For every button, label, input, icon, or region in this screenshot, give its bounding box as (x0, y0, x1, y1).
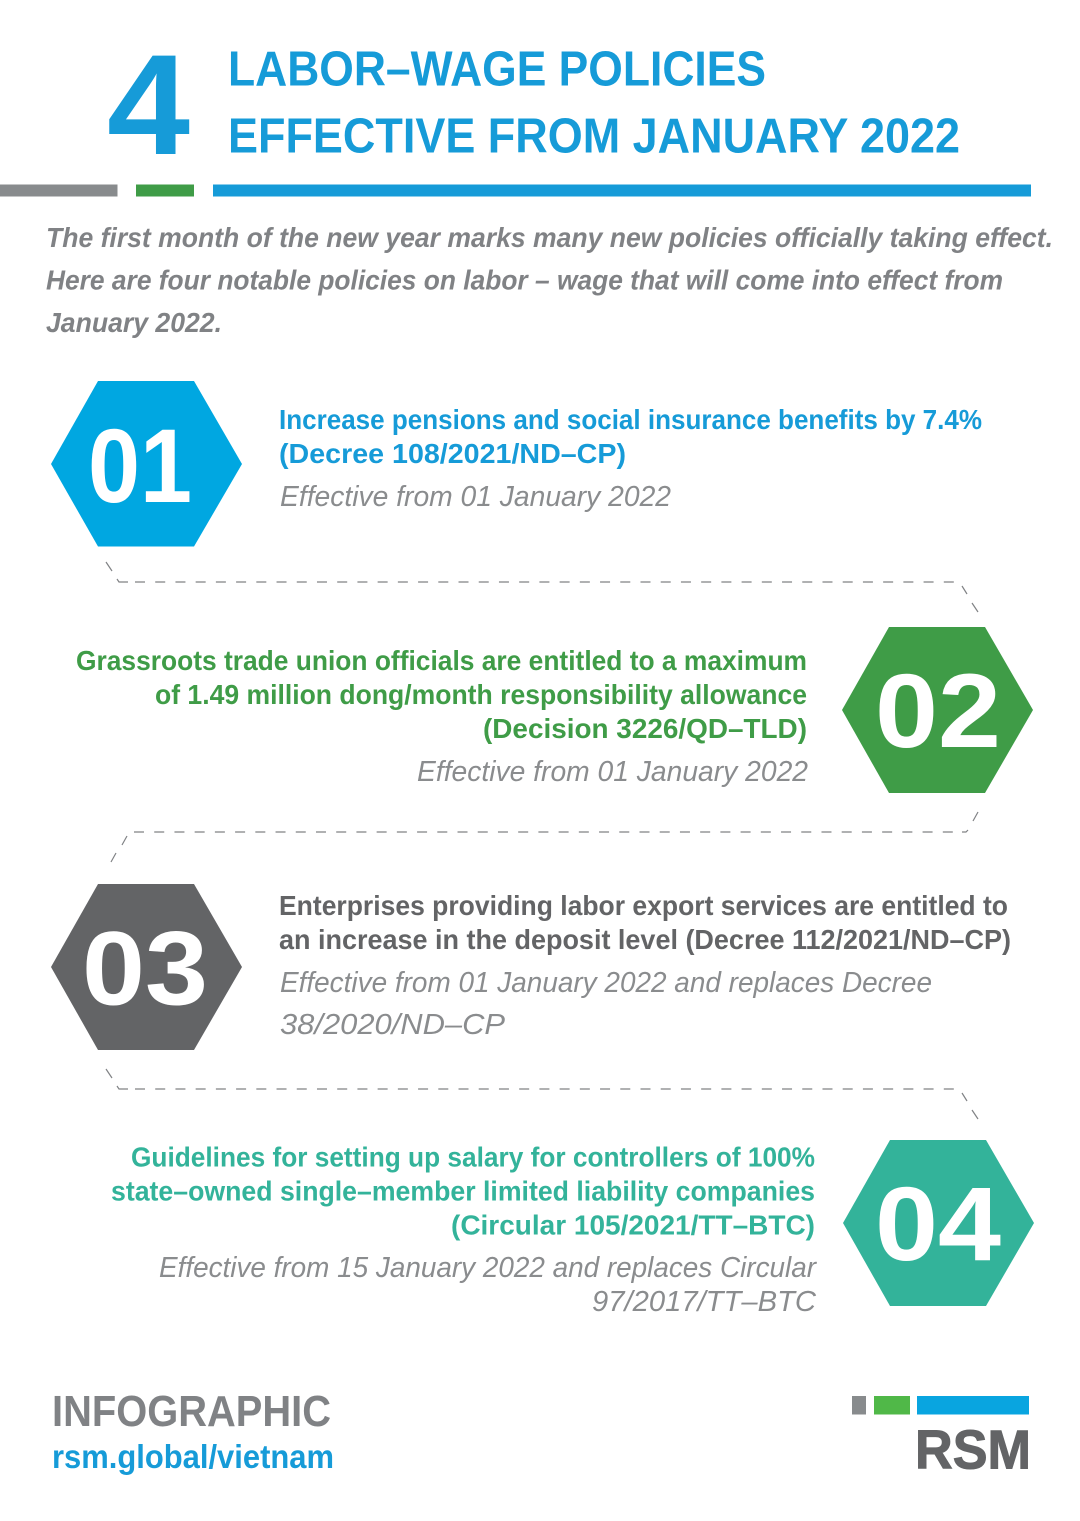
heading text (228, 42, 960, 164)
RSM logo (852, 1396, 1031, 1480)
big number 4: 4 (107, 26, 190, 185)
policy 03 effective date (280, 967, 932, 1041)
title (107, 26, 960, 185)
panel: policy 03 (51, 884, 1011, 1050)
policy 02 title: (Decision 3226/QD–TLD) (483, 713, 807, 744)
policy 02 title: Grassroots trade union officials are entitled to a maximum (76, 645, 807, 676)
connector 02 to 03 (111, 812, 978, 862)
heading text: LABOR–WAGE POLICIES (228, 42, 766, 96)
policy 01 title: (Decree 108/2021/ND–CP) (279, 438, 626, 469)
policy 02 title (76, 645, 807, 744)
policy 01 title: Increase pensions and social insurance benefits by 7.4% (279, 404, 982, 435)
hexagon 04 (843, 1140, 1034, 1306)
hexagon 01: 01 (88, 408, 192, 525)
policy 04 effective date: 97/2017/TT–BTC (592, 1286, 817, 1318)
header colour bar (0, 184, 1031, 196)
intro text: January 2022. (46, 307, 222, 338)
intro text: Here are four notable policies on labor – wage that will come into effect from (46, 264, 1003, 296)
hexagon 02 (842, 627, 1033, 793)
hexagon 04: 04 (875, 1166, 1001, 1283)
policy 03 effective date: 38/2020/ND–CP (280, 1009, 506, 1041)
footer label: rsm.global/vietnam (52, 1438, 334, 1475)
connector 03 to 04 (106, 1069, 978, 1119)
intro text (46, 222, 1053, 338)
policy 03 effective date: Effective from 01 January 2022 and replaces Decree (280, 967, 932, 999)
policy 03 title: Enterprises providing labor export services are entitled to (279, 890, 1008, 921)
heading text: EFFECTIVE FROM JANUARY 2022 (228, 110, 960, 164)
panel: policy 02 (76, 627, 1033, 793)
policy 02 effective date: Effective from 01 January 2022 (417, 756, 808, 788)
panel: policy 01 (51, 381, 982, 546)
RSM logo: RSM (915, 1418, 1031, 1480)
policy 01 effective date: Effective from 01 January 2022 (280, 481, 671, 513)
policy 03 title (279, 890, 1011, 955)
policy 01 title (279, 404, 982, 469)
intro text: The first month of the new year marks many new policies officially taking effect. (46, 222, 1053, 253)
hexagon 03 (51, 884, 242, 1050)
policy 03 title: an increase in the deposit level (Decree 112/2021/ND–CP) (279, 924, 1011, 955)
hexagon 03: 03 (82, 910, 208, 1028)
connector 01 to 02 (106, 562, 978, 612)
policy 04 title (111, 1142, 815, 1240)
policy 04 effective date: Effective from 15 January 2022 and replaces Circular (159, 1252, 817, 1284)
policy 04 title: state–owned single–member limited liability companies (111, 1176, 815, 1206)
panel: policy 04 (111, 1140, 1034, 1318)
policy 04 title: (Circular 105/2021/TT–BTC) (451, 1210, 815, 1240)
policy 04 effective date (159, 1252, 817, 1318)
hexagon 02: 02 (875, 653, 1001, 770)
footer label (52, 1387, 334, 1475)
footer label: INFOGRAPHIC (52, 1387, 331, 1436)
policy 02 title: of 1.49 million dong/month responsibility allowance (155, 679, 807, 710)
policy 04 title: Guidelines for setting up salary for controllers of 100% (131, 1142, 815, 1172)
hexagon 01 (51, 381, 242, 546)
